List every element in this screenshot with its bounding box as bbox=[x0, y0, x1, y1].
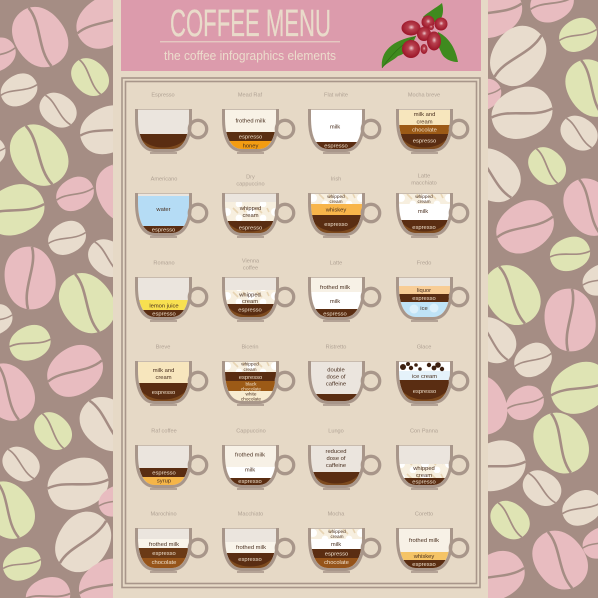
cup: Irish: Irish bbox=[331, 176, 341, 182]
cup: Cappuccino bbox=[222, 428, 294, 490]
cup: Glace bbox=[396, 344, 468, 406]
cup: Ristretto bbox=[308, 344, 380, 406]
cup: Mead Raf: frothed milk bbox=[236, 118, 266, 124]
cup: Con Panna: whipped bbox=[412, 466, 435, 472]
cup: Ristretto: Ristretto bbox=[326, 344, 346, 350]
cup: Mocha breve: espresso bbox=[413, 138, 436, 144]
cup: Bicerin: Bicerin bbox=[241, 344, 259, 350]
cup: Cappuccino: milk bbox=[245, 468, 255, 474]
cup: Espresso: Espresso bbox=[151, 92, 175, 98]
cup: Lungo: reduced bbox=[326, 449, 346, 455]
cup: Dry cappuccino: espresso bbox=[239, 226, 262, 232]
cup: Mead Raf: Mead Raf bbox=[238, 92, 263, 98]
cup: Breve: espresso bbox=[152, 390, 175, 396]
cup: Coretto: frothed milk bbox=[409, 538, 439, 544]
cup: Dry cappuccino: whipped bbox=[239, 206, 261, 212]
cup: Con Panna: espresso bbox=[412, 480, 436, 486]
cup: Latte macchiato bbox=[396, 174, 468, 238]
cup: Fredo: liquor bbox=[417, 288, 431, 294]
cup: Cappuccino: Cappuccino bbox=[236, 428, 266, 434]
cup: Latte: espresso bbox=[323, 312, 347, 318]
icon: coffee berries with leaves bbox=[382, 3, 458, 68]
cup: Mocha: chocolate bbox=[324, 560, 349, 566]
cup: Flat white: milk bbox=[330, 124, 340, 130]
cup: Mocha: Mocha bbox=[328, 512, 345, 518]
cup: Espresso bbox=[135, 92, 207, 154]
cup: Mocha breve: Mocha breve bbox=[408, 92, 440, 98]
cup: Bicerin: black bbox=[246, 382, 257, 386]
central cream sheet bbox=[113, 0, 488, 598]
cup: Irish: cream bbox=[329, 199, 343, 204]
cup: Mocha breve: milk and bbox=[414, 112, 435, 118]
cup: Mocha: cream bbox=[330, 534, 344, 539]
cup: Glace: ice cream bbox=[412, 374, 437, 380]
cup: Dry cappuccino: cappuccino bbox=[236, 182, 265, 188]
cup: Vienna coffee: cream bbox=[242, 299, 258, 305]
cup: Breve: milk and bbox=[153, 368, 174, 374]
cup: Mocha breve: chocolate bbox=[412, 128, 437, 134]
cup: Latte macchiato: Latte bbox=[418, 174, 430, 180]
cup: Fredo: ice bbox=[420, 306, 428, 312]
cup: Irish: whipped bbox=[327, 194, 345, 199]
cup: Raf coffee: syrup bbox=[157, 478, 171, 484]
cup: Americano: Americano bbox=[151, 176, 177, 182]
cup: Lungo: caffeine bbox=[326, 463, 346, 469]
cup: Irish: espresso bbox=[324, 222, 348, 228]
cup: Latte: milk bbox=[330, 299, 340, 305]
cup: Glace: Glace bbox=[417, 344, 431, 350]
cup: Flat white: espresso bbox=[324, 144, 348, 150]
cup: Lungo bbox=[308, 428, 380, 490]
cup: Vienna coffee: whipped bbox=[238, 292, 261, 298]
menu panel frame bbox=[122, 78, 480, 588]
cup: Mead Raf: espresso bbox=[239, 134, 262, 140]
cup: Latte macchiato: cream bbox=[417, 199, 431, 204]
cup: Vienna coffee bbox=[222, 258, 294, 322]
cup: Mocha bbox=[308, 512, 380, 573]
cup: Mead Raf bbox=[222, 92, 294, 154]
cup: Fredo: Fredo bbox=[417, 260, 431, 266]
cup: Raf coffee: espresso bbox=[152, 470, 176, 476]
left coffee bean pattern bbox=[0, 0, 158, 598]
cup: Con Panna: Con Panna bbox=[410, 428, 439, 434]
cup: Fredo: espresso bbox=[412, 296, 436, 302]
cup: Bicerin: chocolate bbox=[241, 386, 261, 392]
cup: Latte macchiato: espresso bbox=[412, 225, 436, 231]
cup: Breve bbox=[135, 344, 207, 406]
cup: Marochino bbox=[135, 512, 207, 573]
cup: Romano: Romano bbox=[153, 260, 175, 266]
cup: Latte bbox=[308, 260, 380, 322]
cup: Coretto: Coretto bbox=[415, 512, 433, 518]
cup: Cappuccino: frothed milk bbox=[235, 452, 265, 458]
right coffee bean pattern bbox=[449, 0, 600, 598]
cup: Mocha: espresso bbox=[325, 552, 348, 558]
cup: Bicerin bbox=[222, 344, 294, 406]
cup: Mead Raf: honey bbox=[243, 144, 258, 150]
cup: Latte macchiato: whipped bbox=[415, 194, 433, 199]
cup: Latte macchiato: milk bbox=[418, 209, 428, 215]
cup: Americano: water bbox=[155, 207, 171, 213]
cup: Vienna coffee: coffee bbox=[243, 266, 258, 272]
cup: Fredo bbox=[396, 260, 468, 322]
cup: Ristretto: dose of bbox=[326, 374, 346, 380]
cup: Latte: frothed milk bbox=[320, 285, 350, 291]
cup: Mocha breve bbox=[396, 92, 468, 154]
header banner bbox=[121, 0, 481, 71]
cup: Irish: whiskey bbox=[325, 208, 346, 214]
cup: Con Panna: cream bbox=[416, 473, 432, 479]
cup: Macchiato: frothed milk bbox=[236, 545, 266, 551]
cup: Dry cappuccino: Dry bbox=[246, 174, 255, 180]
cup: Glace: espresso bbox=[413, 389, 436, 395]
cup: Bicerin: white bbox=[246, 392, 257, 396]
cup: Bicerin: chocolate bbox=[241, 396, 261, 402]
cup: Irish bbox=[308, 176, 380, 238]
cup: Marochino: chocolate bbox=[152, 560, 176, 566]
cup: Marochino: Marochino bbox=[150, 512, 177, 518]
cup: Raf coffee bbox=[135, 428, 207, 490]
cup: Macchiato: espresso bbox=[238, 557, 262, 563]
cup: Macchiato: Macchiato bbox=[238, 512, 263, 518]
cup: Vienna coffee: Vienna bbox=[242, 258, 260, 264]
cup: Vienna coffee: espresso bbox=[238, 308, 262, 314]
cup: Latte: Latte bbox=[330, 260, 342, 266]
cup: Lungo: dose of bbox=[326, 456, 346, 462]
cup: Dry cappuccino: cream bbox=[242, 213, 259, 219]
cup: Con Panna bbox=[396, 428, 468, 490]
cup: Romano: lemon juice bbox=[149, 304, 179, 310]
cup: Macchiato bbox=[222, 512, 294, 573]
cup: Bicerin: espresso bbox=[239, 375, 262, 381]
cup: Americano bbox=[135, 176, 207, 238]
cup: Cappuccino: espresso bbox=[238, 479, 262, 485]
cup: Mocha: milk bbox=[331, 542, 341, 548]
cup: Romano bbox=[135, 260, 207, 322]
cup: Marochino: espresso bbox=[152, 551, 176, 557]
cup: Flat white: Flat white bbox=[324, 92, 348, 98]
cup: Mocha: whipped bbox=[328, 529, 346, 534]
cup: Raf coffee: Raf coffee bbox=[151, 428, 177, 434]
cup: Dry cappuccino bbox=[222, 174, 294, 238]
cup: Latte macchiato: macchiato bbox=[411, 180, 437, 186]
cup: Marochino: frothed milk bbox=[149, 542, 179, 548]
cup: Coretto bbox=[396, 512, 468, 573]
cup: Lungo: Lungo bbox=[328, 428, 344, 434]
cup: Ristretto: caffeine bbox=[326, 382, 346, 388]
cup: Ristretto: double bbox=[327, 368, 345, 374]
cup: Coretto: whiskey bbox=[413, 554, 434, 560]
cup: Coretto: espresso bbox=[412, 562, 436, 568]
cup: Breve: cream bbox=[155, 375, 172, 381]
subtitle: the coffee infographics elements bbox=[164, 48, 336, 63]
cup: Breve: Breve bbox=[156, 344, 170, 350]
cup: Mocha breve: cream bbox=[416, 120, 433, 126]
cup: Bicerin: cream bbox=[243, 367, 257, 372]
cup: Flat white bbox=[308, 92, 380, 154]
title: COFFEE MENU bbox=[170, 3, 331, 45]
cup: Bicerin: whipped bbox=[241, 362, 259, 366]
cup: Romano: espresso bbox=[152, 312, 176, 318]
cup: Americano: espresso bbox=[152, 228, 175, 234]
